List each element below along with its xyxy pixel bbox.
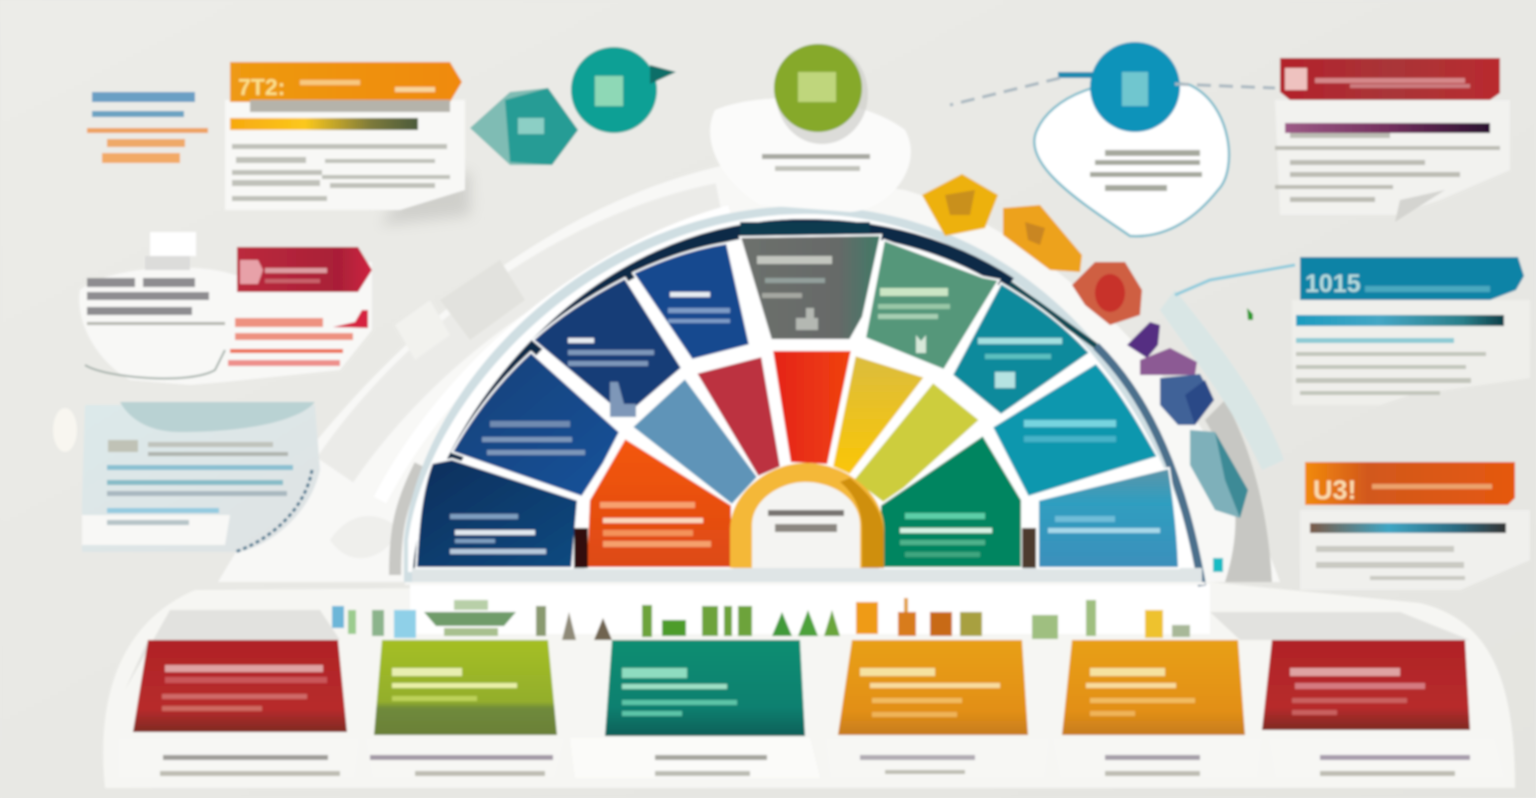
- wheel segments: [416, 459, 578, 568]
- bottom tray: [103, 582, 1515, 788]
- panel: left light-blue: [53, 402, 320, 552]
- panel: right orange: U3!: [1313, 475, 1357, 505]
- dark arch lining: [420, 226, 1010, 570]
- small teal marker: [1213, 558, 1223, 572]
- text lines: [232, 144, 450, 201]
- wheel segment text lines: [450, 256, 1160, 557]
- wheel mini icons: [610, 308, 1015, 417]
- wheel hub: [730, 463, 884, 568]
- panel card: [225, 100, 465, 210]
- text block: top-left heading: [87, 92, 208, 163]
- arch band: [218, 165, 1284, 582]
- bottom card: orange 2: [1052, 640, 1262, 778]
- token: red: [1072, 262, 1142, 325]
- panel: top-left orange: 7T2:: [238, 74, 285, 100]
- token: purple: [1127, 322, 1160, 358]
- icon: green plants: [642, 605, 840, 637]
- panel: right orange: [1300, 462, 1530, 590]
- token: orange: [1003, 205, 1082, 272]
- right side tokens chain: [922, 174, 1248, 572]
- panel shadow: [380, 170, 470, 225]
- wheel: semicircular chart: [404, 206, 1206, 586]
- token: blue: [1160, 374, 1214, 425]
- bottom card: lime: [365, 640, 565, 778]
- icon: orange bottles: [856, 598, 982, 636]
- icon: blue circle: [1090, 42, 1180, 132]
- bottom card: red 2: [1262, 640, 1505, 778]
- banner: [230, 62, 462, 102]
- icon: teal pentagon: [470, 88, 578, 165]
- panel: top-right red: [1275, 58, 1510, 222]
- panel: right teal: [1175, 257, 1530, 405]
- panel: top-centre-right blue bubble: [950, 42, 1275, 236]
- wheel outer shell: [404, 206, 1206, 582]
- bottom card: red 1: [118, 640, 360, 778]
- panel: left red bubble: [79, 232, 372, 385]
- token: teal: [1190, 430, 1248, 518]
- icon: teal circle: [571, 47, 676, 133]
- bottom card: teal: [570, 640, 820, 778]
- bubble outline: [85, 350, 225, 378]
- panel: right teal: 1015: [1305, 270, 1361, 298]
- bottom card: orange 1: [825, 640, 1050, 778]
- icon row above bottom cards: [332, 598, 1190, 640]
- connector line: [1175, 265, 1295, 295]
- icon: green circle: [774, 44, 862, 132]
- panel: top-left orange: [225, 62, 470, 225]
- panel: top-centre green: [710, 44, 911, 212]
- icon: dish: [424, 612, 516, 626]
- gradient rule: [230, 118, 418, 130]
- connector lines: [950, 78, 1275, 105]
- token: yellow: [922, 174, 998, 236]
